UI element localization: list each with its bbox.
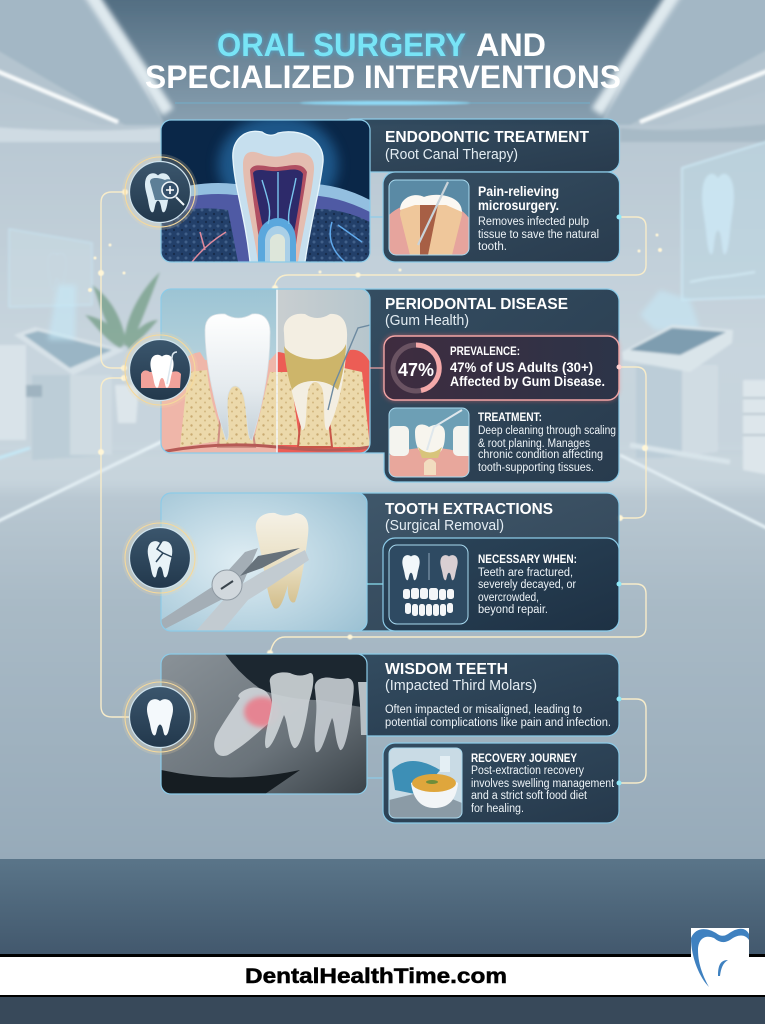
treatment text: Deep cleaning through scaling bbox=[478, 425, 616, 437]
treatment text: tooth-supporting tissues. bbox=[478, 462, 594, 474]
title: AND bbox=[476, 27, 546, 63]
icon: damaged teeth bbox=[389, 545, 468, 624]
footer strip bbox=[0, 954, 765, 997]
necessary when text bbox=[478, 552, 577, 616]
description text: tooth. bbox=[478, 241, 507, 253]
necessary when text: NECESSARY WHEN: bbox=[478, 552, 577, 566]
section 1: endodontic treatment bbox=[161, 115, 622, 262]
subheading: (Surgical Removal) bbox=[385, 518, 504, 534]
subheading: (Gum Health) bbox=[385, 313, 469, 329]
left hologram bbox=[9, 229, 92, 307]
description text bbox=[478, 184, 599, 253]
bottom band bbox=[0, 859, 765, 955]
panel: description bbox=[383, 172, 620, 262]
recovery text: RECOVERY JOURNEY bbox=[471, 751, 577, 765]
heading: PERIODONTAL DISEASE bbox=[385, 296, 568, 313]
title: ORAL SURGERY bbox=[217, 27, 466, 63]
description text bbox=[385, 704, 611, 729]
description text: microsurgery. bbox=[478, 198, 559, 213]
panel: necessary when bbox=[383, 538, 619, 631]
recovery text: and a strict soft food diet bbox=[471, 790, 588, 802]
panel: header bbox=[340, 654, 619, 736]
title: ORAL SURGERY bbox=[217, 27, 466, 63]
necessary when text: Teeth are fractured, bbox=[478, 567, 573, 579]
description text: Often impacted or misaligned, leading to bbox=[385, 704, 582, 716]
icon: tooth with magnifier bbox=[122, 154, 198, 230]
description text: Removes infected pulp bbox=[478, 216, 589, 228]
image: forceps and tooth bbox=[161, 493, 367, 631]
heading: ENDODONTIC TREATMENT bbox=[385, 129, 589, 146]
right hologram screen bbox=[682, 136, 765, 300]
prevalence text: Affected by Gum Disease. bbox=[450, 373, 605, 389]
icon: cracked tooth bbox=[122, 520, 198, 596]
panel: recovery bbox=[383, 743, 619, 823]
subheading: (Root Canal Therapy) bbox=[385, 147, 518, 163]
necessary when text: beyond repair. bbox=[478, 604, 548, 616]
image: scaling thumbnail bbox=[389, 408, 473, 477]
image: healthy vs diseased tooth bbox=[161, 289, 370, 453]
title: SPECIALIZED INTERVENTIONS bbox=[145, 59, 621, 95]
prevalence text: PREVALENCE: bbox=[450, 346, 520, 358]
image: root canal thumbnail bbox=[389, 180, 469, 255]
floor bbox=[0, 450, 765, 880]
treatment text: TREATMENT: bbox=[478, 410, 542, 424]
description text: potential complications like pain and infection. bbox=[385, 717, 611, 729]
recovery text: involves swelling management bbox=[471, 778, 615, 790]
necessary when text: severely decayed, or bbox=[478, 579, 576, 591]
subheading: (Impacted Third Molars) bbox=[385, 678, 537, 694]
plant bbox=[85, 272, 160, 350]
treatment text: & root planing. Manages bbox=[478, 438, 590, 450]
donut chart: 47%: 47% bbox=[398, 360, 434, 380]
footer text: DentalHealthTime.com bbox=[245, 965, 507, 988]
image: tooth cross-section bbox=[161, 115, 370, 262]
heading: TOOTH EXTRACTIONS bbox=[385, 501, 553, 518]
ceiling bbox=[0, 0, 765, 142]
icon: healthy tooth bbox=[122, 679, 198, 755]
callout: prevalence bbox=[383, 335, 619, 401]
prevalence text bbox=[450, 346, 605, 389]
description text: Pain-relieving bbox=[478, 184, 559, 199]
treatment text: chronic condition affecting bbox=[478, 449, 603, 461]
section 3: tooth extractions bbox=[161, 493, 622, 631]
image: x-ray bbox=[161, 654, 367, 794]
treatment text bbox=[478, 410, 616, 474]
recovery text: for healing. bbox=[471, 803, 524, 815]
logo: tooth bbox=[691, 928, 749, 987]
recovery text bbox=[471, 751, 615, 815]
donut chart: 47% bbox=[393, 345, 439, 391]
icon: tooth in gum with probe bbox=[122, 332, 198, 408]
description text: tissue to save the natural bbox=[478, 229, 599, 241]
necessary when text: overcrowded, bbox=[478, 592, 539, 604]
section 2: periodontal disease bbox=[161, 289, 622, 482]
right kiosk bbox=[622, 290, 765, 478]
image: recovery soup bbox=[389, 748, 462, 818]
heading: WISDOM TEETH bbox=[385, 661, 508, 678]
left kiosk bbox=[0, 327, 125, 464]
panel: header bbox=[340, 493, 619, 631]
connector lines bbox=[88, 189, 662, 783]
title bbox=[145, 27, 621, 105]
panel: right bbox=[350, 289, 619, 482]
section 4: wisdom teeth bbox=[161, 654, 622, 823]
prevalence text: 47% of US Adults (30+) bbox=[450, 359, 593, 375]
panel: header bbox=[340, 119, 620, 172]
recovery text: Post-extraction recovery bbox=[471, 765, 584, 777]
